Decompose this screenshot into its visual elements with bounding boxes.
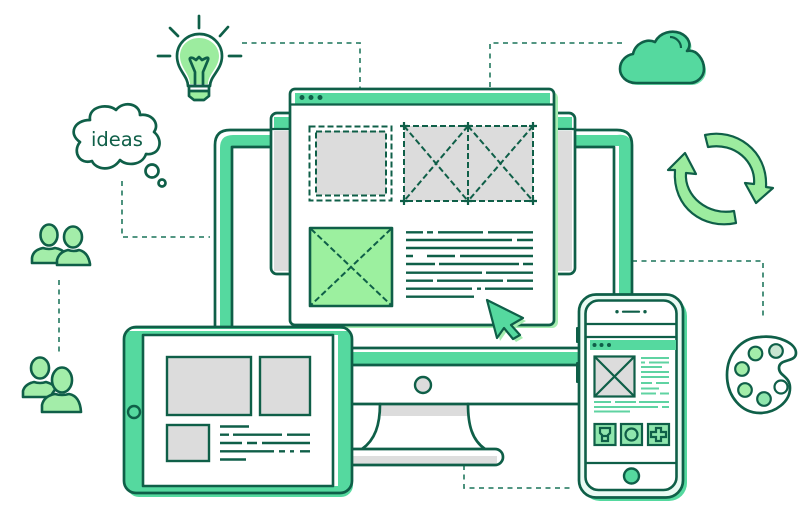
back browser window (271, 113, 575, 274)
monitor chin (340, 352, 580, 364)
dashed image placeholder (310, 126, 392, 200)
icon: ideas thought bubble (74, 104, 166, 186)
icon: refresh arrows (668, 134, 773, 224)
phone title bar (590, 340, 676, 350)
phone app icons (594, 424, 669, 445)
dashed crossed placeholders (400, 122, 537, 205)
monitor stand (362, 404, 485, 450)
monitor frame (215, 130, 632, 345)
phone speaker (615, 310, 647, 313)
window title bar (291, 93, 554, 104)
icon: light bulb (158, 16, 241, 100)
text lines (406, 232, 533, 297)
monitor (215, 130, 632, 465)
phone home button (624, 468, 639, 484)
smartphone (576, 294, 687, 501)
icon: cursor arrow (487, 300, 526, 342)
tablet text lines (220, 426, 310, 460)
label: ideas: ideas (91, 128, 143, 151)
tablet image blocks (167, 357, 310, 461)
green image placeholder (310, 228, 392, 306)
icon: users pair top (32, 224, 90, 265)
icon: cloud (620, 32, 706, 85)
phone image placeholder (594, 356, 634, 396)
tablet (124, 327, 353, 497)
lower arrow (668, 153, 736, 224)
upper arrow (705, 134, 773, 203)
icon: colour palette (727, 337, 796, 413)
monitor base (340, 449, 503, 465)
icon: users pair bottom (23, 358, 81, 412)
phone text lines (594, 358, 669, 412)
connector lines (59, 43, 763, 488)
main browser window (290, 89, 558, 328)
